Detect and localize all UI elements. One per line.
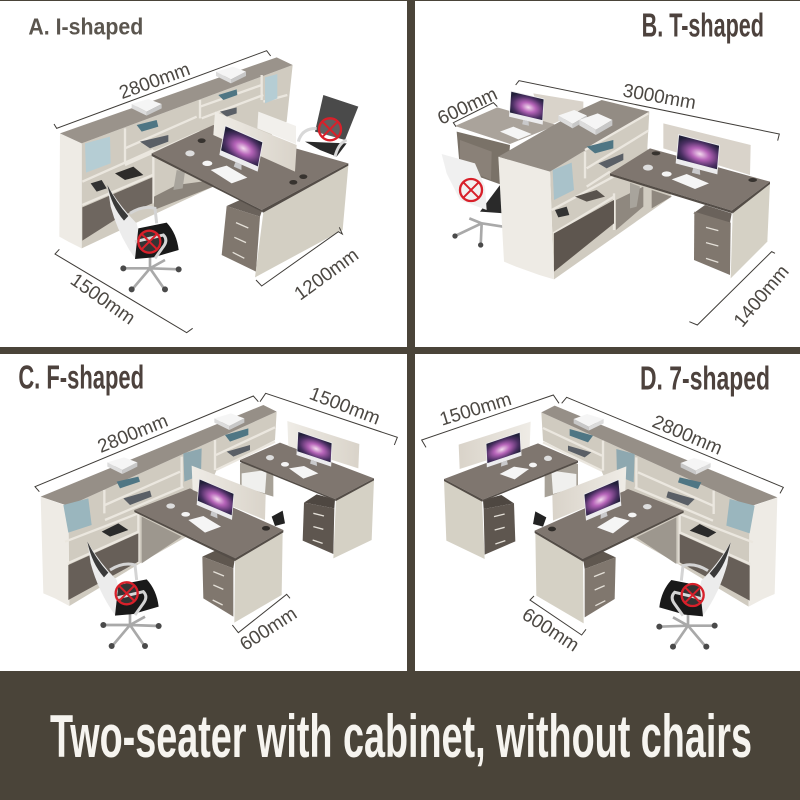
label 600mm: 600mm [236,603,301,655]
icon: no chair back [319,118,341,140]
label 2800mm: 2800mm [649,412,725,460]
dimension line 600mm [232,594,290,633]
dimension line 3000mm [516,81,779,141]
chair: back right [298,95,358,157]
label 1200mm: 1200mm [291,245,363,305]
dimension line 1400mm [689,252,775,325]
panel: A. I-shaped [0,1,407,347]
dimension line 1500mm [55,249,193,333]
chair: behind cabinet [442,154,505,248]
panel: C. F-shaped [0,354,407,671]
desk scene D [422,360,783,656]
dimension line 2800mm [562,397,783,493]
panel: B. T-shaped [415,1,800,347]
label 1500mm: 1500mm [306,383,383,430]
icon: no chair [116,582,138,604]
chair: front [107,185,182,292]
dimension line 2800mm [54,51,271,128]
label 600mm: 600mm [435,84,501,130]
label 1400mm: 1400mm [730,261,794,332]
dimension line 1500mm [422,395,559,447]
label 2800mm: 2800mm [95,411,171,458]
icon: no chair front [138,231,160,253]
dimension line 600mm [453,103,497,127]
dimension line 600mm [530,596,586,635]
label 2800mm: 2800mm [116,59,193,104]
label 600mm: 600mm [518,604,583,656]
label 3000mm: 3000mm [621,80,697,114]
desk scene C [18,359,397,655]
label 1500mm: 1500mm [66,270,139,329]
desk scene A [28,13,363,333]
heading C: C. F-shaped [18,359,144,396]
dimension line 1500mm [260,393,397,445]
label 1500mm: 1500mm [437,389,514,431]
desk scene B [435,8,794,332]
icon: no chair [682,584,704,606]
dimension line 2800mm [35,396,258,492]
icon: no chair [460,179,482,201]
dimension line 1200mm [256,227,342,286]
panel: D. 7-shaped [415,354,800,671]
heading A: A. I-shaped [28,13,143,39]
